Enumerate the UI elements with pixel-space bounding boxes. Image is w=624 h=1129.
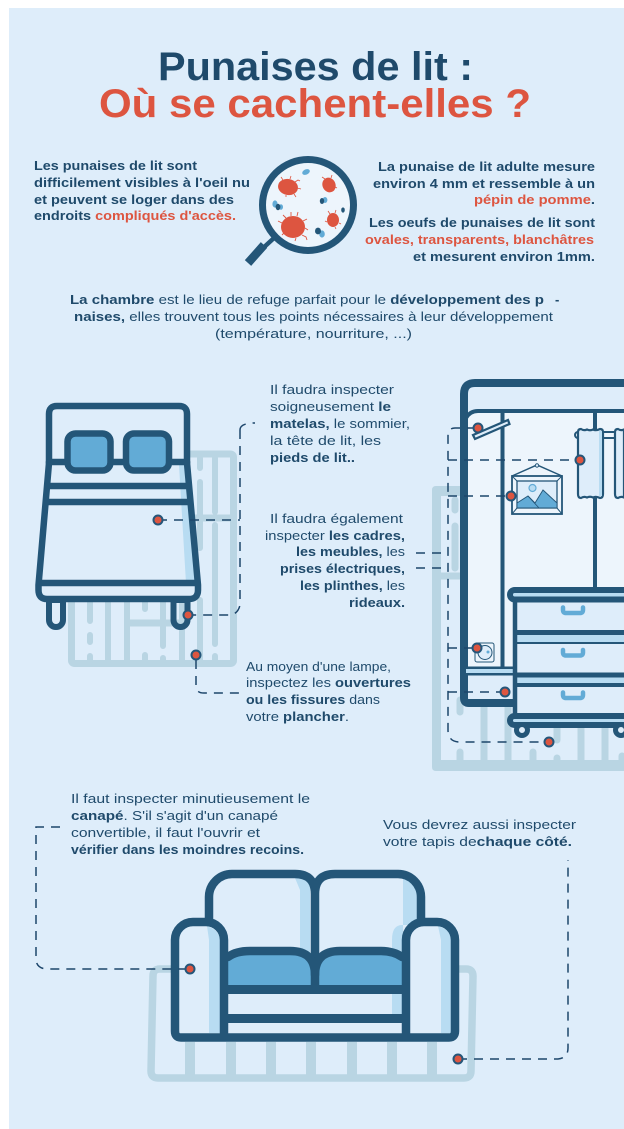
icon: sofa: [175, 874, 455, 1038]
floor under wardrobe: [432, 486, 624, 771]
title: Punaises de lit :: [158, 45, 473, 89]
text block: inspect frames: rideaux.: [349, 595, 405, 610]
text block: la chambre: naises, elles trouvent tous les points nécessaires à leur développement: [74, 309, 553, 324]
text block: right adult bug description: [365, 159, 596, 264]
electrical outlet: [475, 643, 494, 662]
rug under sofa: [151, 969, 473, 1078]
text block: left intro: difficilement visibles à l'oeil nu: [34, 175, 250, 190]
title: [99, 45, 531, 126]
text block: inspect mattress: Il faudra inspecter: [270, 382, 395, 397]
text block: sofa: vérifier dans les moindres recoins.: [71, 842, 304, 857]
text block: left intro: Les punaises de lit sont: [34, 158, 198, 173]
text block: inspect mattress: soigneusement le: [270, 399, 391, 414]
text block: la chambre: [70, 292, 559, 341]
text block: lamp: Au moyen d'une lampe,: [246, 659, 391, 674]
icon: magnifying glass with bed bugs: [248, 160, 354, 263]
callout: room connectors: [416, 424, 584, 746]
curtains: [575, 429, 624, 498]
text block: inspect mattress: pieds de lit..: [270, 450, 355, 465]
text block: left intro: endroits compliqués d'accès.: [34, 208, 236, 223]
floor under bed: [72, 454, 234, 664]
text block: lamp: inspectez les ouvertures: [246, 675, 411, 690]
text block: right adult bug description: La punaise de lit adulte mesure: [378, 159, 595, 174]
text block: inspect frames: les meubles, les: [296, 544, 406, 559]
wall shelf: [473, 420, 510, 439]
picture frame: [512, 464, 562, 514]
text block: right adult bug description: ovales, transparents, blanchâtres: [365, 232, 594, 247]
text block: right adult bug description: et mesurent environ 1mm.: [413, 249, 595, 264]
callout: bed connectors: [154, 423, 255, 693]
pillows: [68, 434, 169, 470]
dresser: [510, 590, 624, 736]
icon: bed: [38, 406, 198, 627]
text block: left intro: et peuvent se loger dans des: [34, 192, 234, 207]
text block: inspect mattress: matelas, le sommier,: [270, 416, 410, 431]
text block: sofa: [71, 791, 310, 857]
title: Où se cachent-elles ?: [99, 82, 531, 126]
icon: room wall with dresser: [464, 383, 624, 736]
text block: inspect frames: les plinthes, les: [300, 578, 406, 593]
text block: inspect frames: inspecter les cadres,: [265, 528, 405, 543]
text block: inspect frames: [265, 511, 406, 610]
text block: left intro: [34, 158, 250, 223]
text block: la chambre: La chambre est le lieu de refuge parfait pour le développement des p: [70, 292, 544, 307]
text block: sofa: Il faut inspecter minutieusement le: [71, 791, 310, 806]
text block: carpet: [383, 817, 577, 849]
text block: sofa: convertible, il faut l'ouvrir et: [71, 825, 260, 840]
text block: inspect frames: Il faudra également: [270, 511, 403, 526]
text block: inspect frames: prises électriques,: [280, 561, 405, 576]
text block: carpet: votre tapis de chaque côté.: [383, 834, 572, 849]
text block: la chambre: (température, nourriture, ...): [215, 326, 412, 341]
text block: carpet: Vous devrez aussi inspecter: [383, 817, 577, 832]
text block: right adult bug description: environ 4 mm et ressemble à un: [373, 176, 595, 191]
text block: sofa: canapé . S'il s'agit d'un canapé: [71, 808, 278, 823]
text block: lamp: votre plancher .: [246, 709, 349, 724]
sofa arms: [175, 922, 455, 1038]
text block: lamp: [246, 659, 411, 724]
text block: inspect mattress: la tête de lit, les: [270, 433, 382, 448]
callout: sofa connectors: [36, 827, 568, 1064]
text block: lamp: ou les fissures dans: [246, 692, 381, 707]
text block: right adult bug description: Les oeufs de punaises de lit sont: [369, 215, 596, 230]
text block: right adult bug description: pépin de pomme .: [474, 192, 595, 207]
text block: la chambre: -: [555, 292, 559, 307]
text block: inspect mattress: [270, 382, 410, 465]
